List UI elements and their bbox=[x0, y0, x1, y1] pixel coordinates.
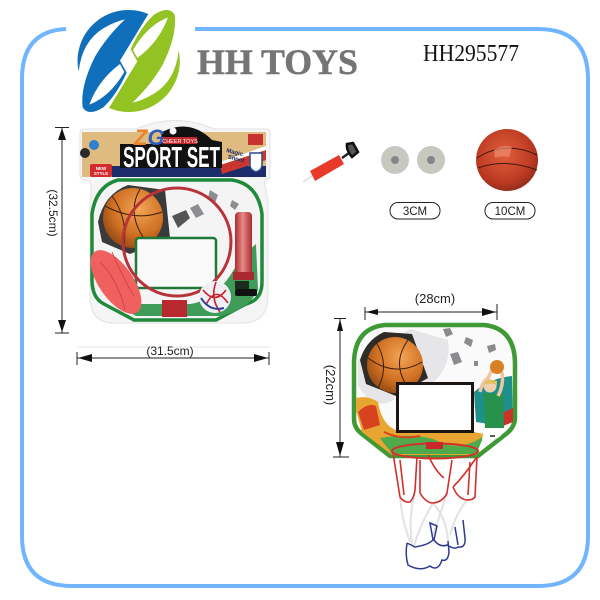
header card bbox=[80, 122, 266, 177]
grey wall bbox=[358, 329, 449, 404]
icon: HH logo bbox=[78, 10, 180, 112]
magic shoot label: Shoot bbox=[227, 155, 245, 165]
package photo bbox=[80, 120, 270, 323]
blue net bbox=[406, 520, 465, 569]
label: 3CM bbox=[390, 202, 440, 219]
dimension: package height: (32.5cm) bbox=[46, 189, 60, 237]
label: 10CM: 10CM bbox=[495, 206, 525, 218]
new style badge: NEW bbox=[96, 166, 107, 171]
icon: suction cup left bbox=[381, 146, 409, 174]
cheer toys tag: CHEER TOYS bbox=[162, 139, 198, 145]
white backboard window bbox=[136, 238, 216, 288]
wall cracks bbox=[172, 190, 239, 228]
dimension: backboard height: (22cm) bbox=[323, 365, 338, 405]
dimension: package width bbox=[77, 344, 269, 365]
brand sticker bbox=[89, 140, 99, 150]
red net bbox=[393, 453, 477, 503]
dimension: backboard width: (28cm) bbox=[415, 291, 455, 306]
cracks bbox=[360, 332, 428, 396]
icon: suction cup right bbox=[417, 146, 445, 174]
brand name: HH TOYS bbox=[197, 42, 358, 82]
pink net bundle bbox=[81, 242, 151, 322]
rim bracket bbox=[426, 442, 443, 449]
sport set title: SPORT SET bbox=[123, 142, 220, 174]
colour art bottom bbox=[356, 397, 484, 455]
icon: small air pump bbox=[303, 143, 358, 182]
icon: small red ball bbox=[476, 129, 538, 191]
ZG logo text: ZG bbox=[133, 125, 165, 150]
basketball bbox=[367, 337, 423, 393]
dark crack ring bbox=[98, 185, 170, 254]
age tag bbox=[248, 134, 263, 145]
hoop and net bbox=[392, 442, 478, 569]
colour art strip bbox=[96, 244, 258, 316]
dimension: backboard width bbox=[365, 291, 497, 320]
dimension: package width: (31.5cm) bbox=[146, 344, 194, 358]
boy player bbox=[474, 360, 513, 440]
hand pump bbox=[233, 212, 257, 296]
new style badge: STYLE bbox=[94, 171, 108, 176]
white net bbox=[400, 490, 467, 546]
label: 3CM: 3CM bbox=[403, 206, 427, 218]
model number: HH295577 bbox=[423, 41, 519, 67]
red hoop ring bbox=[123, 188, 231, 317]
shield icon bbox=[250, 153, 262, 172]
dimension: backboard height bbox=[323, 318, 349, 457]
white window bbox=[398, 384, 472, 432]
green board bbox=[92, 180, 262, 320]
basketball backboard bbox=[354, 325, 515, 456]
new style badge bbox=[90, 164, 112, 177]
magic shoot label: Magic bbox=[226, 148, 243, 158]
board body bbox=[354, 325, 515, 456]
dimension: package height bbox=[46, 127, 69, 333]
red rim bbox=[392, 444, 478, 458]
blue red net bbox=[199, 281, 231, 313]
blister outline bbox=[80, 120, 270, 323]
label: 10CM bbox=[485, 202, 535, 219]
basketball bbox=[103, 188, 163, 248]
debris bbox=[443, 328, 496, 366]
